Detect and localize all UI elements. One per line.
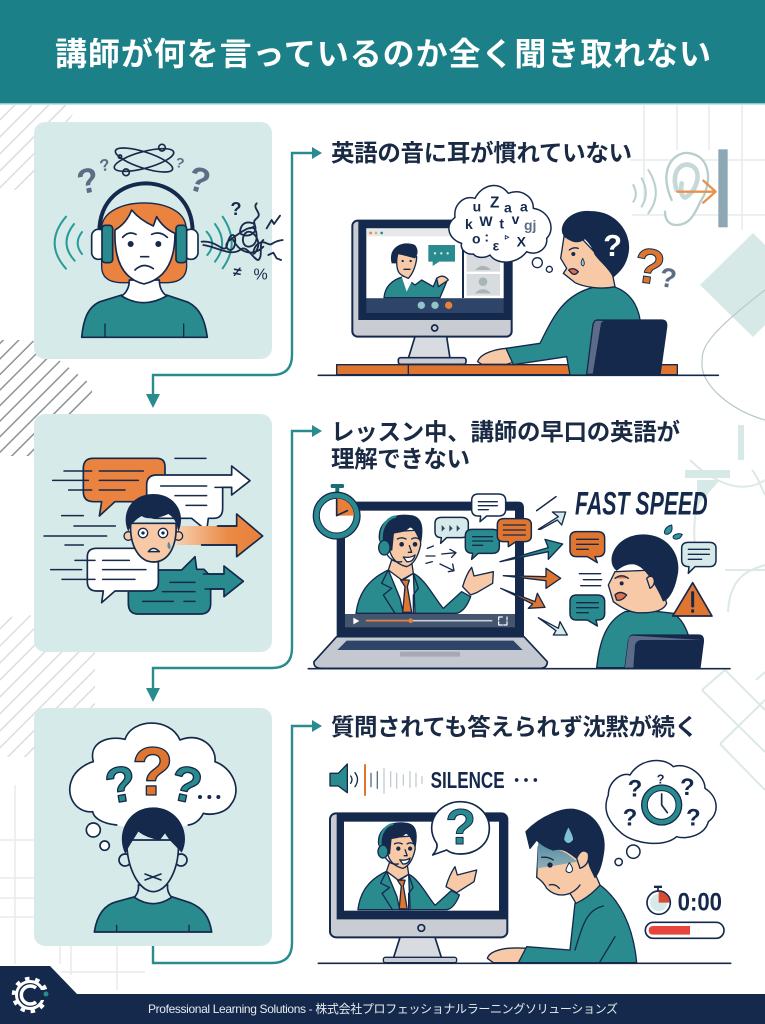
thought cloud with clock [606,760,716,866]
thought cloud with letters [449,185,552,272]
scene: fast talking instructor on laptop [308,484,730,669]
instructor speech bubbles [435,494,531,559]
stopwatch [313,484,360,539]
person: body [82,295,207,337]
icon: sound waves right [207,217,232,268]
video control bar [345,614,515,627]
thought cloud with letters: : [484,229,489,245]
thought cloud with letters: Z [490,194,499,211]
connector 1 [146,147,322,408]
scene: silence on video call: ? [445,799,476,855]
instructor figure on monitor [358,823,459,910]
person [94,897,212,932]
panel: silent thinking person: ? [166,754,207,815]
thought cloud with letters: k [465,216,473,232]
icon: sound waves left [55,217,82,269]
panel: headphones listener: % [254,266,268,283]
heading 2: 理解できない [331,446,470,472]
icon: grey question marks: ? [184,159,215,202]
footer bar [0,966,765,1024]
thought cloud with letters: a [504,199,512,215]
speech bubble with question [432,802,489,855]
thought cloud with clock: ? [680,774,695,801]
thought cloud with clock: ? [623,804,637,831]
scene: silence on video call [318,760,731,963]
icon: confused orbit scribble [112,143,176,177]
header banner [0,0,765,104]
icon: grey question marks [73,154,215,203]
SILENCE label: SILENCE [431,767,505,793]
thought cloud with letters: ▹ [504,231,510,241]
student [597,535,703,668]
icon: speaker and waveform [330,764,422,795]
timer [645,886,724,938]
thought cloud with clock: ? [686,804,701,831]
thought cloud [70,723,236,833]
thought cloud with letters: X [517,234,527,250]
thought cloud with letters: W [479,213,493,229]
thought cloud with letters: ε [493,238,500,254]
desk [337,365,677,375]
panel: fast speech bubbles [34,414,272,652]
white arrow bubble [147,466,250,531]
monitor [352,221,512,337]
logo [14,978,50,1012]
icon: grey question marks: ? [174,154,186,171]
icon: grey question marks: ? [98,155,111,175]
warning triangle [673,583,712,616]
drops [664,525,682,539]
connector 3 [153,720,322,963]
heading 2: レッスン中、講師の早口の英語が [331,418,680,445]
sweating student [518,809,637,963]
teacher on screen [384,243,455,298]
icon: headphones [99,183,193,233]
hand on desk [487,948,533,963]
monitor [330,813,507,937]
scene: online class on monitor: ? [603,229,622,263]
instructor figure on laptop [356,515,471,613]
student speech bubbles [570,532,716,626]
thought cloud with letters: gj [524,217,536,233]
thought cloud with letters: v [512,211,520,227]
worried face [124,532,133,540]
instructor hand [463,567,493,595]
heading 2 [331,418,680,472]
orange arrow [177,514,263,557]
title: 講師が何を言っているのか全く聞き取れない [55,36,711,72]
teal arrow bubble [128,557,243,614]
thought cloud with letters: o [472,230,481,246]
panel: headphones listener: ? [230,198,242,219]
timer: 0:00 [678,889,722,917]
heading 1: 英語の音に耳が慣れていない [331,139,632,166]
speed lines [44,458,237,601]
student [478,212,667,375]
scene: online class on monitor [318,149,728,375]
scene: online class on monitor: ? [658,261,679,294]
panel: silent thinking person [34,708,272,946]
panel: headphones listener: ≠ [232,264,243,281]
white speech bubble [87,548,158,603]
icon: grey question marks: ? [73,160,102,203]
panel: headphones listener [34,122,283,359]
orange speech bubble [83,458,165,516]
thought cloud with letters: a [520,199,528,215]
thought cloud with letters: u [473,199,481,215]
scene: online class on monitor: ? [631,237,668,296]
speech lines and arrows [426,546,456,572]
footer text: Professional Learning Solutions - 株式会社プロフェッショナルラーニングソリューションズ [148,1001,618,1016]
thought cloud with clock: ? [657,772,665,786]
thought cloud with clock: ? [628,776,642,803]
laptop [337,502,524,637]
heading 3: 質問されても答えられず沈黙が続く [331,713,698,740]
question marks: ? [132,734,174,810]
icon: tangled noise scribble [202,203,283,260]
panel: silent thinking person: ? [101,754,141,815]
thought cloud with letters: t [499,215,504,231]
icon: ear and barrier [633,149,728,227]
connector 2 [146,425,322,702]
instructor hand [446,867,477,893]
